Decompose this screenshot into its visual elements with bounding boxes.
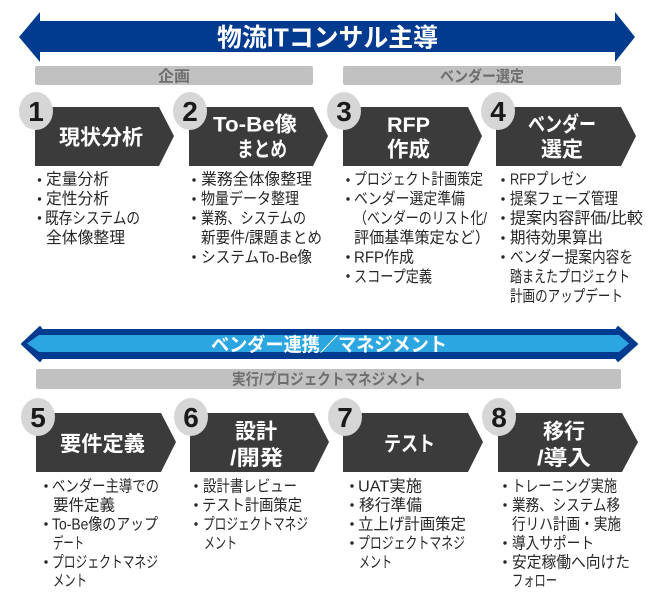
step 7: テスト bbox=[384, 433, 435, 456]
step 8: 移行 bbox=[543, 420, 585, 444]
phase bar: vendor selection: ベンダー選定 bbox=[440, 66, 524, 86]
step 3: 作成 bbox=[387, 138, 430, 162]
step 7 bbox=[328, 398, 483, 472]
step 2: To-Be像 bbox=[213, 114, 297, 136]
step 7 list: 移行準備 bbox=[359, 496, 422, 514]
step 7 list: 立上げ計画策定 bbox=[358, 516, 466, 534]
step 5 list: デート bbox=[53, 534, 84, 552]
step 6: 設計 bbox=[235, 420, 277, 444]
step 5 list: メント bbox=[53, 573, 87, 590]
step 1 list bbox=[38, 170, 140, 247]
step 8: /導入 bbox=[537, 447, 591, 470]
step 7 list: プロジェクトマネジ bbox=[358, 534, 465, 552]
step 4 list bbox=[501, 170, 643, 306]
step 8: 8 bbox=[491, 402, 507, 433]
step 3 list: ベンダー選定準備 bbox=[354, 190, 465, 208]
step 6 list: プロジェクトマネジ bbox=[203, 516, 308, 534]
step 4: 選定 bbox=[541, 138, 583, 162]
step 8 list bbox=[503, 478, 630, 590]
step 2 list: 新要件/課題まとめ bbox=[201, 229, 322, 247]
step 4 list: 提案フェーズ管理 bbox=[510, 190, 618, 208]
step 4 list: 期待効果算出 bbox=[510, 228, 603, 247]
step 1 list: 定性分析 bbox=[46, 190, 109, 208]
step 5 list: To-Be像のアップ bbox=[52, 516, 158, 534]
step 7 list bbox=[350, 478, 466, 572]
step 2 list: 業務全体像整理 bbox=[201, 170, 312, 188]
step 3 bbox=[327, 92, 482, 166]
step 2 list: 業務、システムの bbox=[201, 210, 306, 228]
phase bar: execution and project management: 実行/プロジェクトマネジメント bbox=[232, 370, 426, 388]
phase bar: planning: 企画 bbox=[158, 66, 190, 86]
step 5: 5 bbox=[30, 402, 46, 433]
step 3 list: RFP作成 bbox=[354, 248, 414, 266]
step 4 list: ベンダー提案内容を bbox=[510, 248, 633, 266]
step 1 list: 定量分析 bbox=[46, 170, 109, 188]
step 5: 要件定義 bbox=[60, 433, 145, 456]
step 5 list: プロジェクトマネジ bbox=[52, 554, 158, 572]
step 8 bbox=[482, 398, 638, 472]
arrow banner: consulting led bbox=[19, 12, 635, 62]
step 4: 4 bbox=[490, 96, 506, 127]
step 6 list: テスト計画策定 bbox=[202, 496, 302, 514]
arrow banner: consulting led: 物流ITコンサル主導 bbox=[217, 24, 438, 52]
step 6 list: メント bbox=[204, 536, 237, 552]
step 1 list: 既存システムの bbox=[45, 210, 140, 228]
step 8 list: トレーニング実施 bbox=[512, 478, 617, 496]
step 8 list: 安定稼働へ向けた bbox=[512, 554, 630, 572]
phase bar: vendor selection bbox=[343, 66, 621, 86]
step 8 list: フォロー bbox=[512, 573, 557, 590]
step 8 list: 導入サポート bbox=[512, 534, 594, 552]
step 5 list: ベンダー主導での bbox=[52, 476, 159, 496]
step 8 list: 行リハ計画・実施 bbox=[512, 516, 621, 534]
step 4: ベンダー bbox=[528, 112, 596, 136]
step 5 list bbox=[44, 476, 159, 590]
step 7 list: UAT実施 bbox=[358, 478, 422, 496]
step 1: 1 bbox=[28, 96, 44, 127]
step 6 list: 設計書レビュー bbox=[203, 478, 297, 496]
step 3: RFP bbox=[387, 114, 430, 137]
step 3: 3 bbox=[336, 96, 352, 127]
step 2 list: 物量データ整理 bbox=[201, 189, 299, 208]
step 7 list: メント bbox=[359, 554, 392, 572]
phase bar: execution and project management bbox=[36, 369, 621, 389]
step 7: 7 bbox=[337, 402, 353, 433]
step 3 list: 評価基準策定など） bbox=[354, 229, 490, 247]
step 4 list: 提案内容評価/比較 bbox=[510, 210, 643, 228]
step 2 list bbox=[192, 170, 322, 266]
step 5 list: 要件定義 bbox=[53, 496, 115, 514]
step 4 list: 踏まえたプロジェクト bbox=[510, 268, 630, 286]
step 6 list bbox=[194, 478, 308, 552]
phase bar: planning bbox=[35, 66, 313, 86]
step 3 list: （ベンダーのリスト化/ bbox=[354, 210, 487, 228]
arrow banner: vendor management bbox=[22, 327, 637, 361]
step 6: /開発 bbox=[230, 447, 283, 470]
step 2: 2 bbox=[182, 96, 198, 127]
step 1 list: 全体像整理 bbox=[46, 229, 125, 247]
step 4 list: 計画のアップデート bbox=[510, 286, 623, 306]
step 4 bbox=[481, 92, 636, 166]
step 5 bbox=[21, 398, 176, 472]
step 8 list: 業務、システム移 bbox=[512, 496, 620, 514]
step 4 list: RFPプレゼン bbox=[510, 170, 587, 188]
step 3 list: スコープ定義 bbox=[354, 268, 432, 286]
arrow banner: vendor management: ベンダー連携／マネジメント bbox=[211, 333, 447, 356]
step 3 list bbox=[346, 170, 490, 286]
step 2 bbox=[173, 92, 328, 166]
step 1: 現状分析 bbox=[59, 126, 143, 150]
step 6 bbox=[174, 398, 329, 472]
step 6: 6 bbox=[183, 402, 199, 433]
step 2 list: システムTo-Be像 bbox=[201, 248, 312, 266]
step 1 bbox=[19, 92, 174, 166]
step 3 list: プロジェクト計画策定 bbox=[354, 170, 483, 188]
step 2: まとめ bbox=[237, 138, 287, 162]
